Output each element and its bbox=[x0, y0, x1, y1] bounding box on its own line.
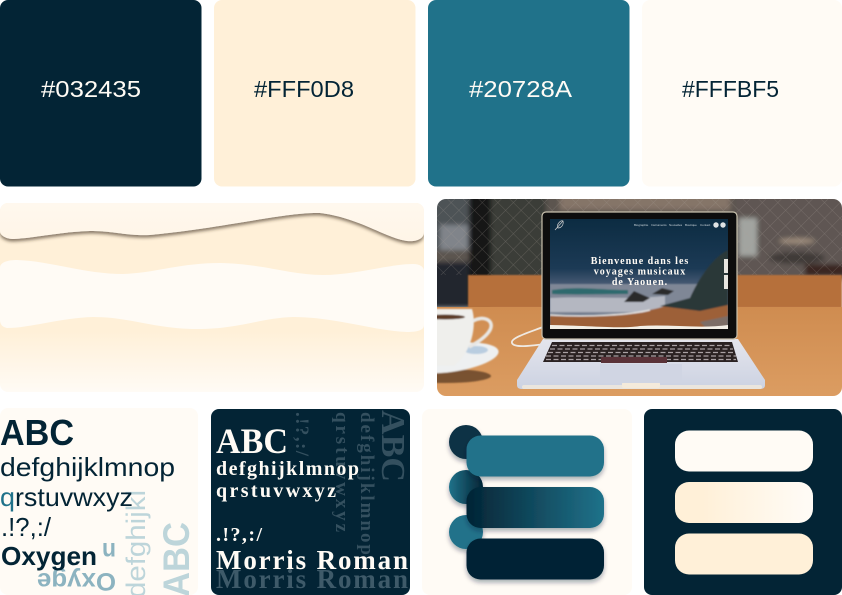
wooden bench bbox=[468, 275, 842, 308]
navigation: Instruments bbox=[651, 223, 667, 227]
navigation bbox=[634, 224, 710, 226]
website on screen bbox=[550, 219, 728, 330]
panel: Oxygen typeface: Oxyge bbox=[37, 567, 116, 595]
laptop base bbox=[517, 339, 765, 389]
panel: Oxygen typeface bbox=[0, 408, 198, 595]
rotated specimens bbox=[291, 410, 411, 555]
swatch: #FFFBF5 bbox=[642, 0, 842, 186]
photo: laptop on a wooden table bbox=[437, 199, 842, 396]
trackpad bbox=[622, 382, 660, 383]
panel: Oxygen typeface: qrstuvwxyz bbox=[0, 482, 133, 512]
panel: wave dividers bbox=[0, 203, 424, 392]
laptop bbox=[517, 212, 765, 389]
navigation: Boutique bbox=[685, 223, 697, 227]
swatch: #20728A: #20728A bbox=[469, 76, 573, 102]
panel: Oxygen typeface: n bbox=[102, 537, 116, 565]
swatch: #032435 bbox=[0, 0, 202, 186]
screen bezel bbox=[542, 212, 737, 339]
panel: Morris Roman typeface: defghijklmnop bbox=[216, 458, 359, 480]
cafe background bbox=[437, 199, 842, 307]
middle wave bbox=[0, 260, 424, 332]
charging cable bbox=[512, 327, 545, 346]
panel: Oxygen typeface: Oxygen bbox=[1, 541, 97, 571]
language buttons bbox=[713, 222, 719, 228]
panel: Morris Roman typeface bbox=[211, 409, 411, 595]
top wave with shadow bbox=[0, 203, 424, 241]
rotated specimens: .!?,:/ bbox=[291, 412, 312, 457]
hero title bbox=[590, 256, 688, 285]
hero title: Bienvenue dans les bbox=[591, 256, 689, 267]
panel: Oxygen typeface: .!?,:/ bbox=[1, 512, 52, 542]
rotated specimens: ABC bbox=[374, 410, 411, 482]
panel: dark and teal buttons bbox=[422, 409, 632, 595]
cup and saucer bbox=[437, 308, 500, 384]
swatch: #FFF0D8 bbox=[214, 0, 416, 186]
panel: Morris Roman typeface: .!?,:/ bbox=[216, 524, 262, 546]
round buttons bbox=[449, 425, 483, 549]
cream pill buttons bbox=[675, 430, 813, 574]
rotated specimens: qrstuvwxyz bbox=[331, 412, 352, 533]
hero title: de Yaouen. bbox=[612, 277, 668, 288]
navigation: Nouvelles bbox=[669, 223, 683, 227]
keyboard bbox=[543, 342, 738, 362]
specimen text: ABC bbox=[0, 412, 74, 453]
rotated specimens: ABC bbox=[156, 522, 197, 595]
specimen text: ABC bbox=[216, 421, 288, 461]
navigation: Contact bbox=[700, 223, 711, 227]
hero title: voyages musicaux bbox=[594, 266, 686, 278]
shadow copy of name: Morris Roman bbox=[216, 564, 408, 594]
panel: Morris Roman typeface: qrstuvwxyz bbox=[216, 480, 336, 502]
pill buttons bbox=[466, 436, 604, 580]
panel: Morris Roman typeface: Morris Roman bbox=[216, 545, 408, 575]
swatch: #20728A bbox=[428, 0, 630, 186]
panel: light buttons on navy bbox=[644, 409, 842, 595]
logo bbox=[555, 221, 563, 230]
rotated specimens bbox=[126, 492, 190, 595]
swatch: #FFFBF5: #FFFBF5 bbox=[682, 76, 779, 102]
navigation: Biographie bbox=[634, 223, 649, 227]
swatch: #FFF0D8: #FFF0D8 bbox=[254, 76, 354, 102]
rotated specimens: defghijklmnop bbox=[356, 412, 377, 555]
panel: Oxygen typeface: defghijklmnop bbox=[0, 452, 175, 482]
swatch: #032435: #032435 bbox=[41, 76, 141, 102]
side tabs bbox=[724, 259, 728, 273]
table bbox=[437, 307, 842, 399]
